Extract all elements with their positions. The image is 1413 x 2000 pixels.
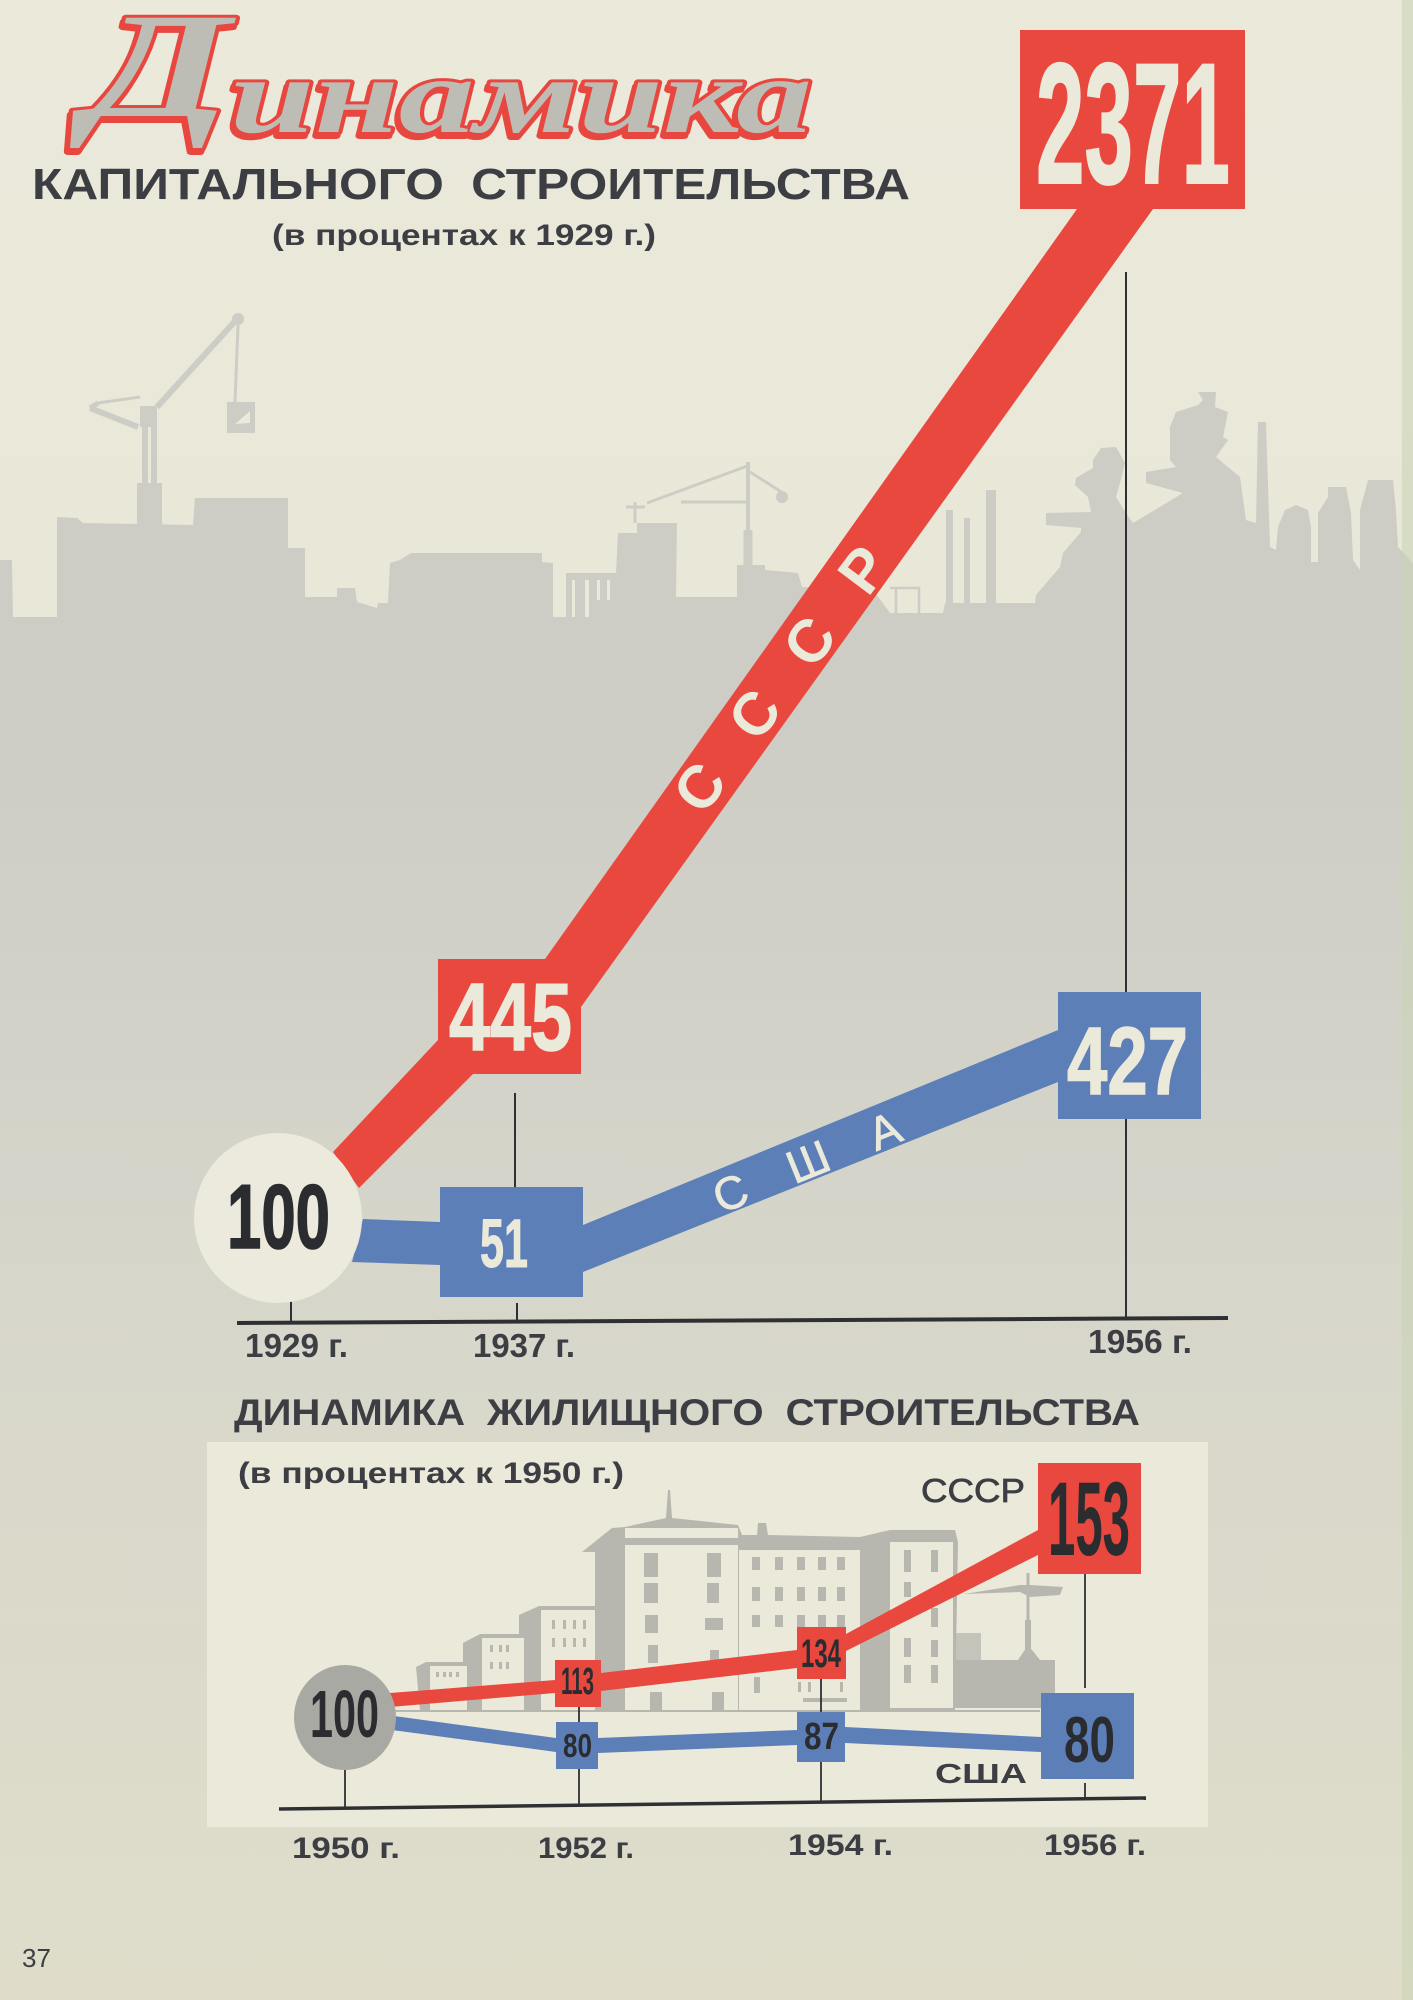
circle: base value 100: 100: [310, 1677, 379, 1752]
box: USSR 2371: [1020, 28, 1245, 220]
box: USA 427: [1058, 992, 1201, 1119]
box: USSR 134: [797, 1627, 846, 1679]
box: USA 87: 87: [804, 1716, 839, 1758]
box: USSR 445: 445: [449, 964, 572, 1071]
circle: base value 100: [194, 1133, 362, 1303]
series label: США: США: [935, 1758, 1027, 1789]
page number: 37: [22, 1943, 51, 1973]
axis label: 1956: 1956 г.: [1044, 1829, 1146, 1862]
box: USA 80 (1956): 80: [1064, 1703, 1115, 1776]
axis label: 1937: 1937 г.: [473, 1327, 575, 1364]
guide lines and axis: [237, 272, 1228, 1323]
strip label: СССР: СССР: [660, 495, 931, 825]
paper edge tint: [1402, 0, 1413, 2000]
box: USSR 113: 113: [561, 1661, 594, 1703]
heading: жилищного строительства: ДИНАМИКА ЖИЛИЩНОГО СТРОИТЕЛЬСТВА: [234, 1392, 1140, 1433]
panel: housing construction: [207, 1442, 1208, 1827]
box: USSR 134: 134: [801, 1632, 841, 1676]
box: USSR 153: [1038, 1461, 1141, 1578]
strip label: США: США: [705, 1084, 951, 1223]
title: Динамика script wordmark: инамика: [230, 37, 812, 156]
subtitle: base year 1950: (в процентах к 1950 г.): [238, 1457, 624, 1490]
axis label: 1954: 1954 г.: [788, 1829, 893, 1862]
box: USA 80 (1956): [1041, 1693, 1134, 1779]
subtitle: base year 1929: (в процентах к 1929 г.): [272, 219, 656, 252]
guide lines and axis: [279, 1574, 1146, 1809]
chart: capital construction: [194, 28, 1245, 1364]
heading: капитального строительства: КАПИТАЛЬНОГО СТРОИТЕЛЬСТВА: [32, 160, 910, 209]
USSR red growth strip: [333, 209, 1153, 1188]
axis label: 1952: 1952 г.: [538, 1832, 634, 1865]
box: USSR 153: 153: [1048, 1461, 1130, 1578]
USA blue strip: [352, 1030, 1058, 1272]
box: USA 427: 427: [1067, 1008, 1188, 1115]
circle: base value 100: [294, 1665, 396, 1770]
box: USSR 2371: 2371: [1036, 28, 1230, 220]
axis label: 1929: 1929 г.: [245, 1327, 348, 1364]
USA blue line: [392, 1716, 1041, 1753]
circle: base value 100: 100: [227, 1167, 330, 1268]
box: USA 51: [440, 1187, 583, 1297]
box: USA 51: 51: [480, 1205, 528, 1282]
series label: СССР: СССР: [921, 1472, 1025, 1509]
box: USA 80 (1952): [556, 1722, 598, 1769]
illustration: apartment buildings and crane: [390, 1490, 1063, 1712]
box: USA 80 (1952): 80: [563, 1727, 592, 1764]
USSR red line: [390, 1530, 1038, 1707]
box: USSR 113: [555, 1660, 601, 1707]
axis label: 1956: 1956 г.: [1088, 1323, 1192, 1360]
axis label: 1950: 1950 г.: [292, 1832, 400, 1865]
